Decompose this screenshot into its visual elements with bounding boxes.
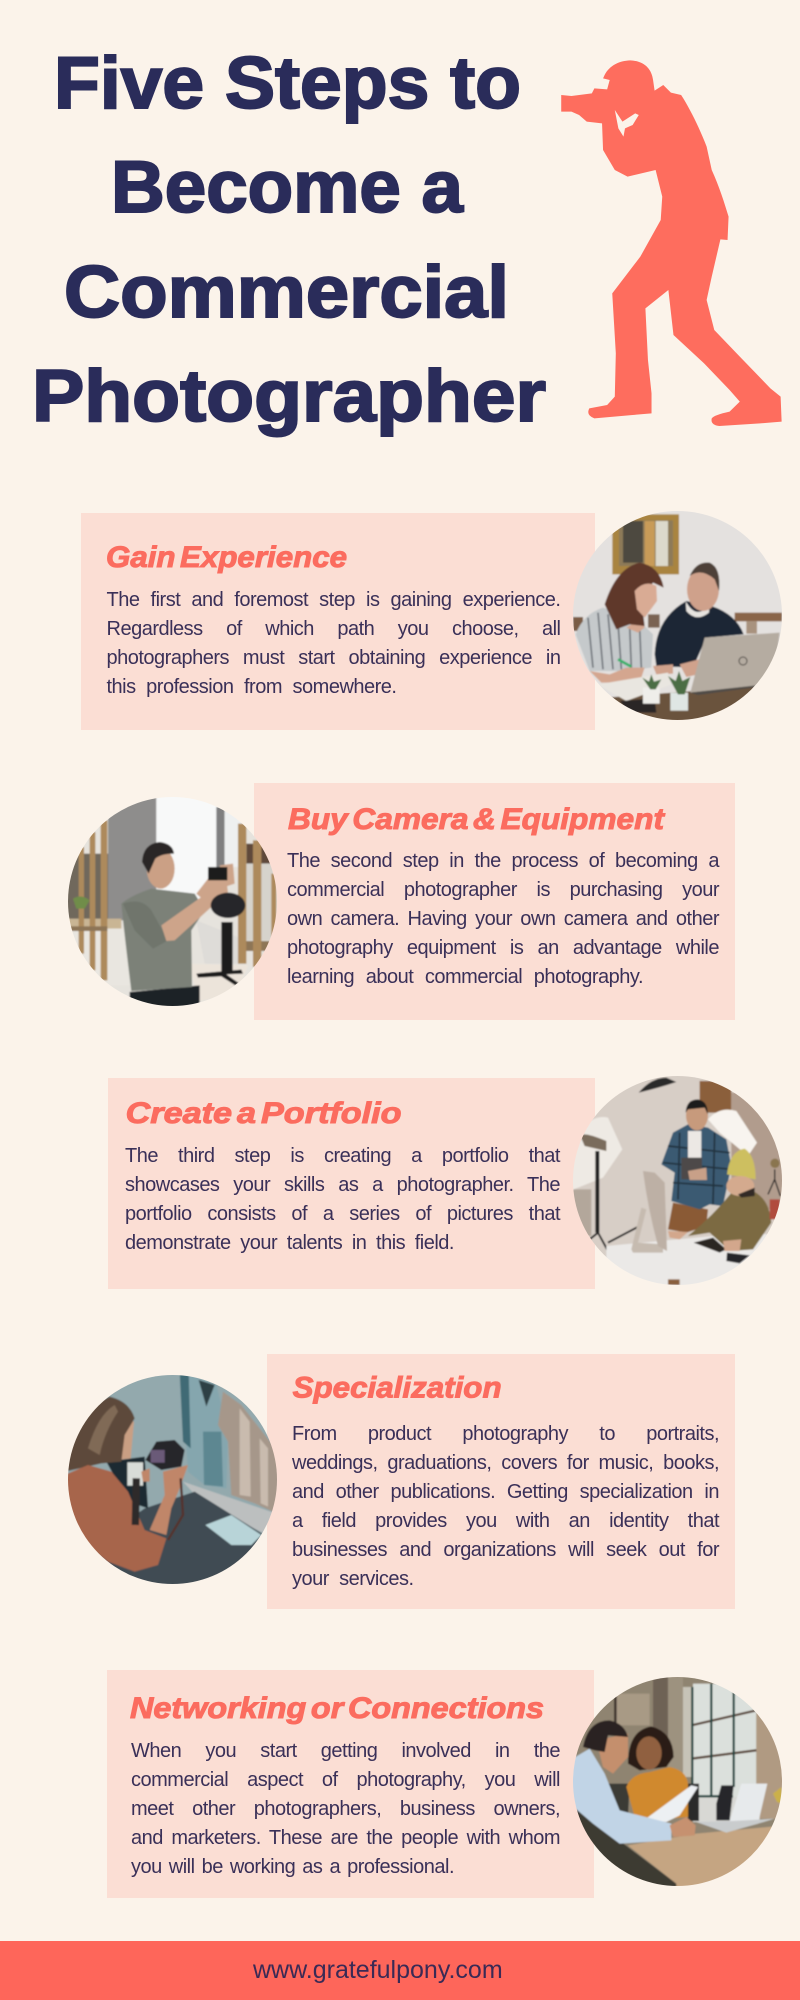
text block: gain experience: photographers must start obtaining experience in <box>106 646 560 668</box>
text block: create a portfolio <box>125 1144 560 1254</box>
text block: specialization: your services. <box>292 1568 414 1590</box>
panel: gain experience <box>81 513 595 730</box>
text block: specialization <box>292 1423 720 1590</box>
text block: create a portfolio: The third step is creating a portfolio that <box>125 1144 560 1166</box>
text block: buy camera and equipment: commercial photographer is purchasing your <box>287 878 719 900</box>
text block: specialization: a field provides you with an identity that <box>292 1510 719 1532</box>
photo: photographers in studio <box>573 1076 782 1285</box>
text block: gain experience <box>106 588 560 698</box>
text block: buy camera and equipment: learning about commercial photography. <box>287 966 643 988</box>
panel: buy camera and equipment <box>254 783 735 1020</box>
text block: buy camera and equipment: The second step in the process of becoming a <box>287 850 719 872</box>
photo: two people at a laptop <box>573 511 782 720</box>
text block: networking or connections <box>131 1740 560 1878</box>
footer band <box>0 1941 800 2000</box>
title: Photographer <box>32 356 546 437</box>
panel: networking or connections <box>107 1670 594 1898</box>
text block: create a portfolio: showcases your skills as a photographer. The <box>125 1174 560 1196</box>
title <box>32 43 546 438</box>
text block: gain experience: this profession from somewhere. <box>106 676 396 698</box>
photo: two colleagues reviewing paper <box>573 1677 782 1886</box>
text block: specialization: From product photography to portraits, <box>292 1423 719 1445</box>
heading: create a portfolio: Create a Portfolio <box>126 1097 402 1130</box>
text block: specialization: businesses and organizations will seek out for <box>292 1539 719 1561</box>
heading: buy camera and equipment: Buy Camera & Equipment <box>288 803 666 836</box>
icon: photographer silhouette <box>561 60 782 426</box>
heading: gain experience: Gain Experience <box>106 541 347 574</box>
heading: specialization: Specialization <box>293 1372 502 1404</box>
text block: networking or connections: and marketers. These are the people with whom <box>131 1826 560 1848</box>
photo: woman with camera <box>68 1375 277 1584</box>
heading: networking or connections: Networking or Connections <box>130 1692 544 1725</box>
text block: specialization: and other publications. Getting specialization in <box>292 1481 719 1503</box>
title: Five Steps to <box>54 43 521 124</box>
photo: man with camera on tripod <box>68 797 277 1006</box>
title: Become a <box>111 147 464 228</box>
panel: create a portfolio <box>108 1078 595 1289</box>
text block: buy camera and equipment: photography equipment is an advantage while <box>287 936 719 958</box>
title: Commercial <box>64 252 509 333</box>
text block: buy camera and equipment <box>287 850 720 988</box>
text block: networking or connections: meet other photographers, business owners, <box>131 1798 560 1820</box>
text block: gain experience: The first and foremost step is gaining experience. <box>106 588 560 610</box>
text block: create a portfolio: portfolio consists of a series of pictures that <box>125 1202 560 1224</box>
panel: specialization <box>267 1354 735 1609</box>
text block: networking or connections: you will be working as a professional. <box>131 1856 454 1878</box>
text block: buy camera and equipment: own camera. Having your own camera and other <box>287 908 719 930</box>
footer website text: www.gratefulpony.com <box>253 1956 503 1984</box>
text block: specialization: weddings, graduations, covers for music, books, <box>292 1452 719 1474</box>
text block: create a portfolio: demonstrate your talents in this field. <box>125 1232 454 1254</box>
text block: gain experience: Regardless of which path you choose, all <box>106 618 560 640</box>
text block: networking or connections: commercial aspect of photography, you will <box>131 1768 560 1790</box>
text block: networking or connections: When you start getting involved in the <box>131 1740 560 1762</box>
